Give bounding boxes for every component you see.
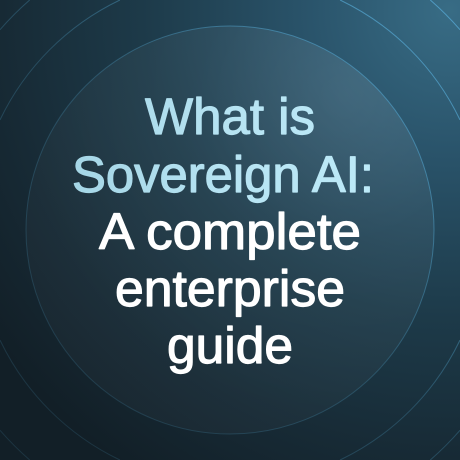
title line: What is: What is: [145, 88, 315, 145]
title line: Sovereign AI:: Sovereign AI:: [72, 146, 374, 203]
title line: A complete: A complete: [99, 203, 361, 260]
title: [72, 88, 374, 374]
inner disc: [26, 26, 434, 434]
title line: enterprise: enterprise: [115, 260, 345, 317]
title line: guide: guide: [167, 317, 293, 374]
